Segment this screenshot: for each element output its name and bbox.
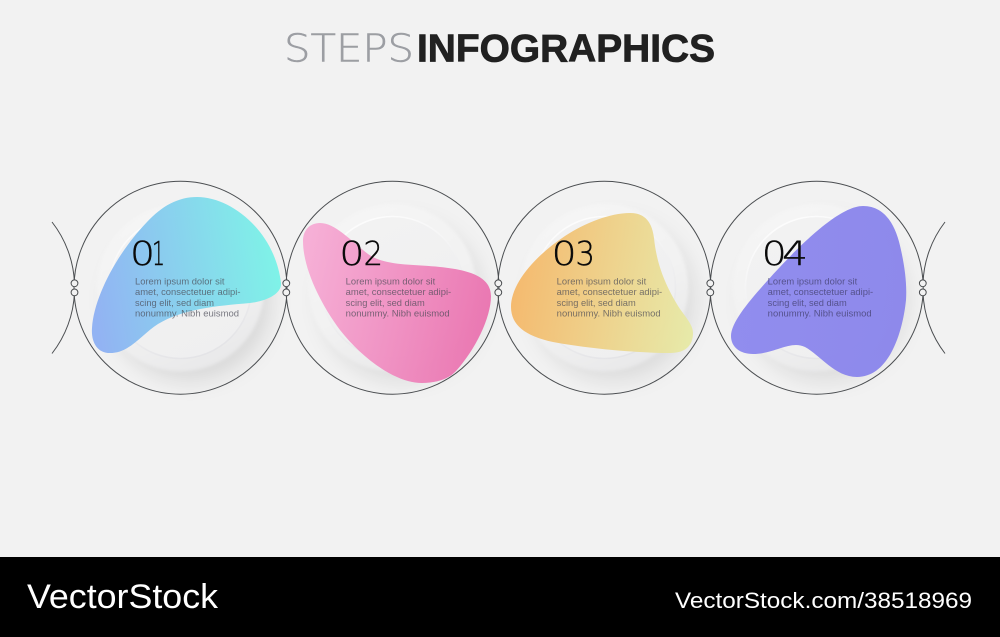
step 4 blob — [731, 206, 906, 377]
step 3 number: 3 — [576, 234, 595, 273]
step 2 number: 2 — [364, 234, 383, 273]
step 4 text: scing elit, sed diam — [768, 298, 847, 308]
footer url: VectorStock.com/38518969 — [675, 588, 972, 613]
step 1 number: 0 — [130, 234, 155, 273]
step 2 text: Lorem ipsum dolor sit — [346, 276, 436, 286]
step 1 disc — [96, 204, 272, 382]
step 1 ring — [74, 181, 287, 394]
title: INFOGRAPHICS — [417, 28, 715, 70]
step 3 number: 0 — [552, 234, 577, 273]
step 3 text: amet, consectetuer adipi- — [557, 287, 662, 297]
step 2 text: amet, consectetuer adipi- — [346, 287, 451, 297]
step 2 text: scing elit, sed diam — [346, 298, 425, 308]
right side arcs — [923, 222, 945, 354]
step 4 number: 0 — [762, 234, 787, 273]
footer logo: VectorStock — [27, 578, 219, 616]
step 4 number: 4 — [782, 234, 808, 273]
step 4 number — [762, 234, 808, 273]
step 3 disc — [520, 204, 696, 382]
step 4 text: Lorem ipsum dolor sit — [768, 276, 858, 286]
title: STEPS — [284, 26, 414, 72]
step 1 text: scing elit, sed diam — [135, 298, 214, 308]
step 3 number — [552, 234, 595, 273]
step 2 blob — [303, 223, 491, 383]
panel: step 4 — [710, 181, 923, 394]
footer bar — [0, 557, 1000, 637]
step 1 number — [130, 234, 165, 273]
panel: step 3 — [498, 181, 711, 394]
step 3 blob — [511, 213, 693, 353]
step 3 ring — [498, 181, 711, 394]
step 2 disc — [308, 204, 484, 382]
step 1 blob — [92, 197, 281, 353]
step 3 text: scing elit, sed diam — [557, 298, 636, 308]
step 1 text: nonummy. Nibh euismod — [135, 308, 239, 318]
step 3 text: Lorem ipsum dolor sit — [557, 276, 647, 286]
step 2 number: 0 — [339, 234, 364, 273]
step 2 text: nonummy. Nibh euismod — [346, 308, 450, 318]
left side arcs — [52, 222, 74, 354]
panel: step 2 — [286, 181, 499, 394]
step 4 text: nonummy. Nibh euismod — [768, 308, 872, 318]
step 1 text: amet, consectetuer adipi- — [135, 287, 240, 297]
panel: step 1 — [74, 181, 287, 394]
step 4 disc — [732, 204, 908, 382]
step 1 number: 1 — [152, 234, 165, 273]
step 1 text: Lorem ipsum dolor sit — [135, 276, 225, 286]
step 4 text: amet, consectetuer adipi- — [768, 287, 873, 297]
step 3 text: nonummy. Nibh euismod — [557, 308, 661, 318]
step 2 ring — [286, 181, 499, 394]
step 2 number — [339, 234, 383, 273]
step 4 ring — [710, 181, 923, 394]
connector nodes — [71, 280, 926, 296]
title — [284, 26, 715, 72]
